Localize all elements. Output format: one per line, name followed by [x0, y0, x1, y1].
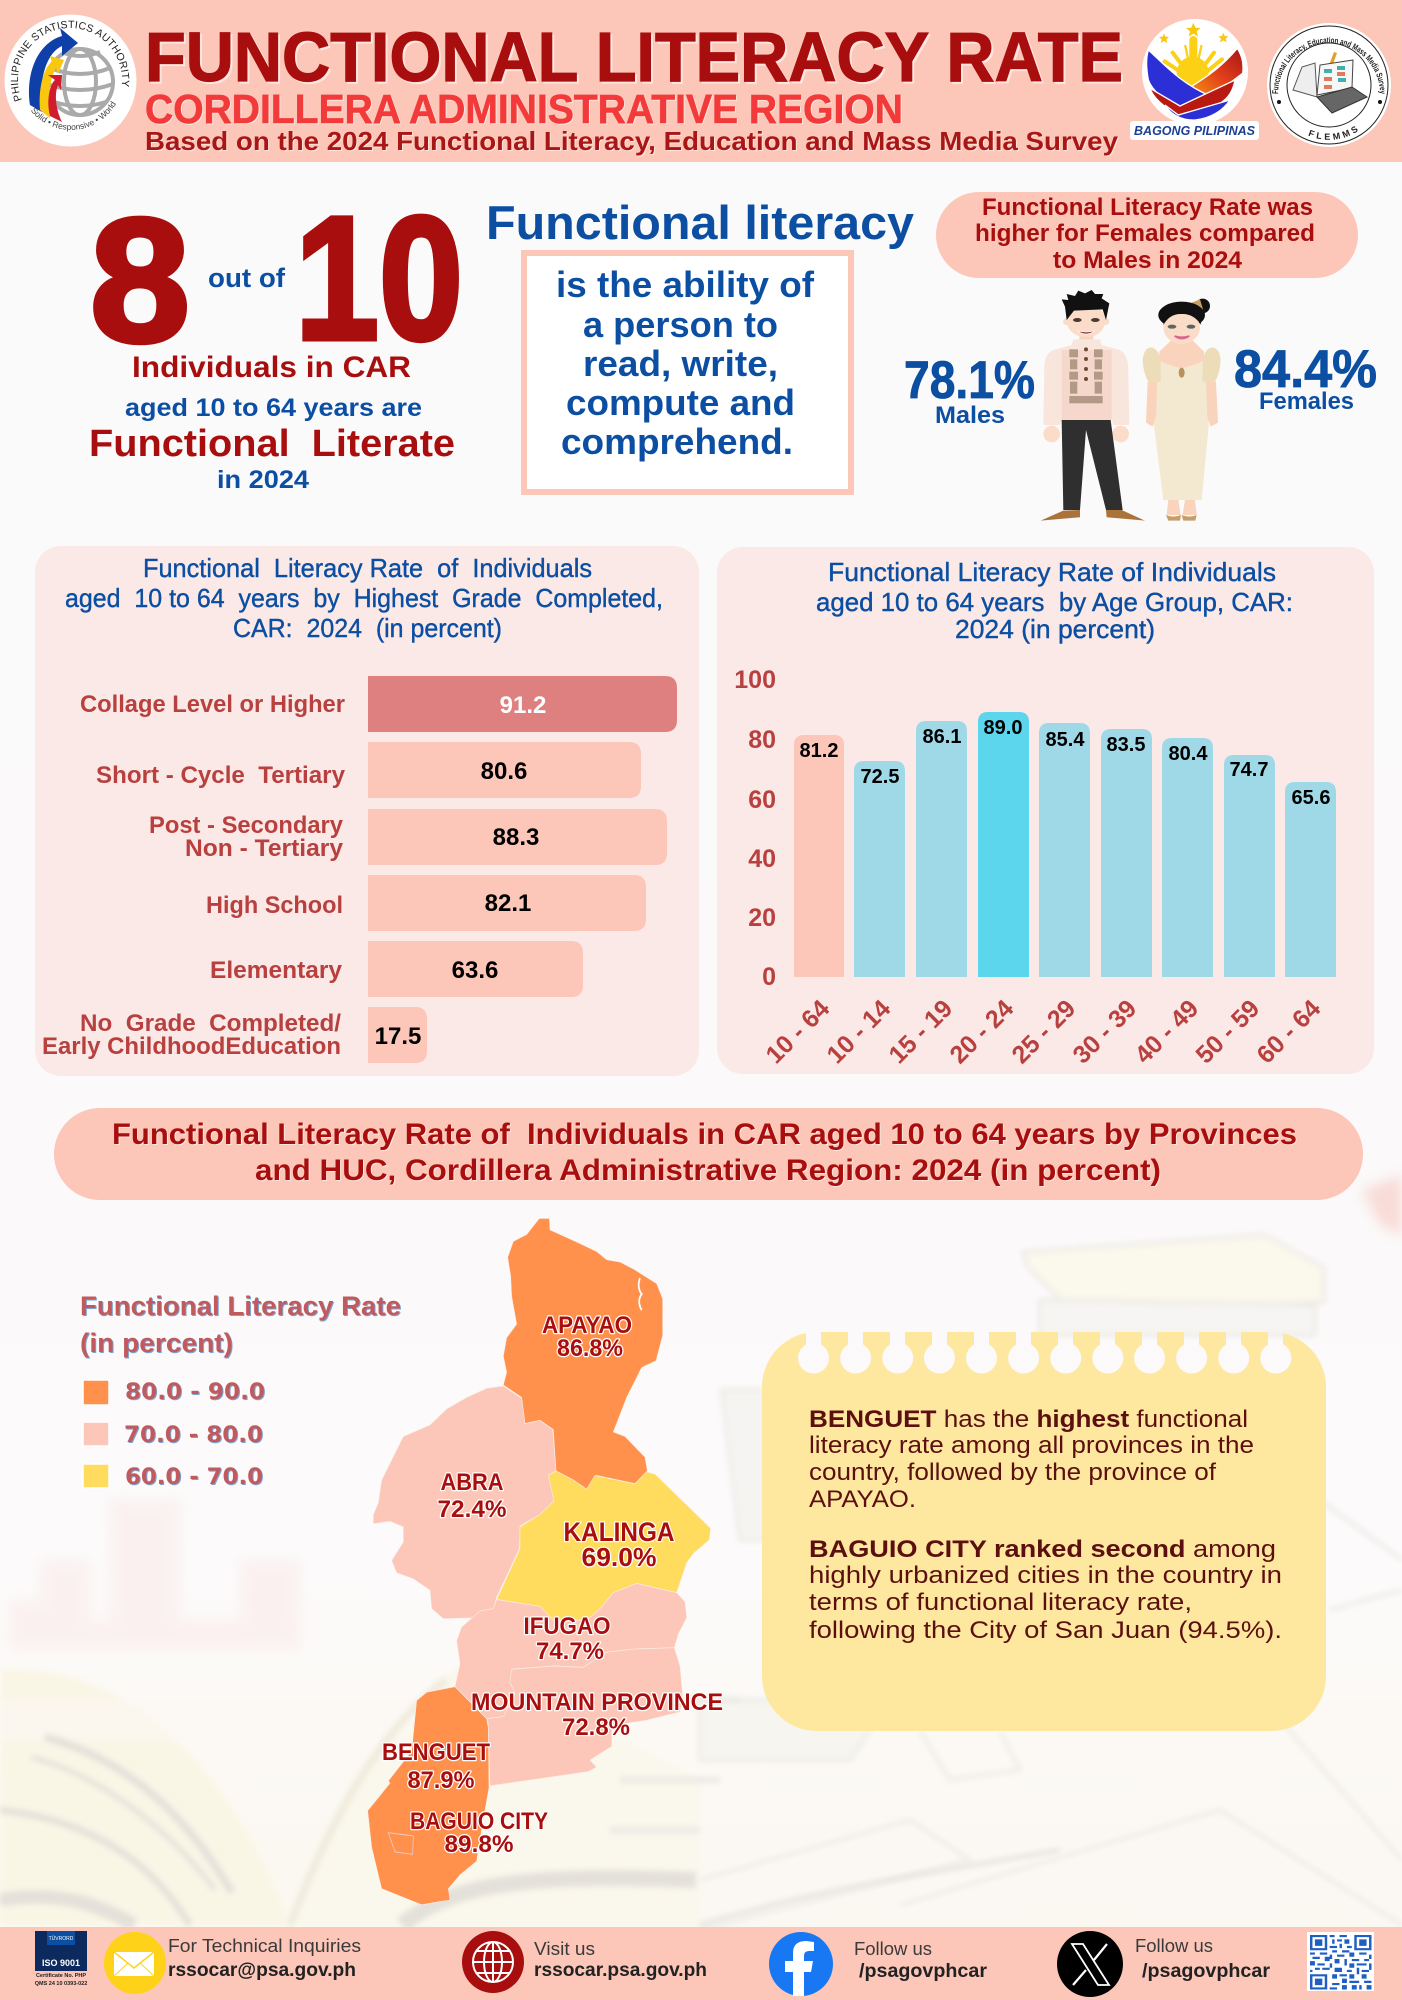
logo: Philippine Statistics Authority — [4, 14, 136, 146]
bar values: 86.1 — [923, 726, 961, 748]
province labels: BAGUIO CITY — [410, 1808, 548, 1835]
chart title — [65, 553, 663, 643]
bar values: 88.3 — [493, 824, 539, 851]
y axis labels — [734, 666, 776, 991]
x axis labels: 25 - 29 — [1006, 994, 1081, 1069]
definition text — [556, 264, 815, 462]
x axis labels: 60 - 64 — [1251, 994, 1326, 1069]
definition text: read, write, — [583, 343, 778, 384]
logo: FLEMMS survey seal: FLEMMS — [1308, 126, 1358, 140]
bar values: 72.5 — [861, 766, 899, 788]
province labels: 72.4% — [438, 1496, 506, 1523]
bar values: 65.6 — [1292, 787, 1330, 809]
facebook text — [854, 1939, 988, 1982]
bar values: 63.6 — [452, 957, 498, 984]
ISO certification badge — [35, 1931, 87, 1987]
x axis labels: 40 - 49 — [1129, 994, 1204, 1069]
illustration: man in barong and woman in filipiniana — [1041, 290, 1221, 521]
province: Benguet — [368, 1687, 489, 1905]
out of: out of — [208, 263, 286, 293]
Baguio boundary — [388, 1833, 413, 1854]
in 2024: in 2024 — [217, 466, 309, 494]
ISO certification badge: TÜVRORD — [49, 1935, 74, 1942]
definition text: a person to — [583, 304, 778, 345]
category labels: Post - Secondary — [149, 812, 344, 839]
province labels: APAYAO — [542, 1312, 632, 1339]
logo: FLEMMS survey seal — [1267, 23, 1391, 147]
province labels: KALINGA — [564, 1517, 674, 1547]
category labels: Early ChildhoodEducation — [42, 1033, 341, 1060]
definition text: compute and — [566, 382, 795, 423]
definition text: comprehend. — [561, 421, 793, 462]
province labels: 74.7% — [536, 1638, 604, 1665]
legend — [80, 1291, 401, 1490]
bar values: 80.4 — [1169, 743, 1208, 765]
bars — [368, 676, 677, 1063]
logo: FLEMMS survey seal: Functional Literacy, Education and Mass Media Survey — [1272, 36, 1384, 94]
header band — [0, 0, 1402, 162]
technical inquiries text — [168, 1936, 361, 1981]
individuals in CAR: Individuals in CAR — [132, 351, 411, 384]
functional literate: Functional Literate — [89, 423, 455, 465]
facebook text: /psagovphcar — [859, 1961, 988, 1982]
map: Cordillera provinces — [368, 1218, 723, 1905]
QR code — [1307, 1932, 1374, 1991]
province labels: 69.0% — [582, 1542, 656, 1572]
province labels — [382, 1312, 723, 1858]
callout: females higher — [936, 192, 1358, 278]
category labels: No Grade Completed/ — [80, 1010, 341, 1037]
ISO certification badge: ISO 9001 — [42, 1958, 80, 1968]
legend title: (in percent) — [80, 1328, 233, 1358]
logo label: BAGONG PILIPINAS — [1134, 123, 1255, 138]
X text: Follow us — [1135, 1936, 1213, 1956]
bar values: 89.0 — [984, 717, 1022, 739]
technical inquiries text: For Technical Inquiries — [168, 1936, 361, 1956]
bar values: 91.2 — [500, 692, 546, 719]
footer band — [0, 1927, 1402, 2000]
legend title: Functional Literacy Rate — [80, 1291, 401, 1321]
x axis labels: 15 - 19 — [883, 994, 958, 1069]
province: Mountain Province — [487, 1648, 683, 1786]
bar values: 80.6 — [481, 758, 527, 785]
province labels: 86.8% — [557, 1335, 623, 1362]
x axis labels: 10 - 64 — [760, 994, 835, 1069]
heading: Functional literacy — [486, 196, 914, 249]
website text: Visit us — [534, 1939, 595, 1959]
note text: literacy rate among all provinces in the — [809, 1432, 1254, 1459]
category labels: Elementary — [210, 957, 343, 984]
bar values: 74.7 — [1230, 759, 1268, 781]
ISO certification badge: QMS 24 10 0393-022 — [35, 1981, 87, 1987]
icon: mail — [104, 1932, 166, 1994]
x axis labels: 50 - 59 — [1190, 994, 1265, 1069]
bar values: 81.2 — [800, 740, 838, 762]
province labels: 89.8% — [444, 1831, 514, 1858]
y axis labels: 40 — [748, 845, 776, 873]
y axis labels: 20 — [748, 904, 776, 932]
icon: facebook — [769, 1932, 833, 1996]
legend labels — [124, 1380, 265, 1490]
icon: globe — [462, 1931, 524, 1993]
chart title — [816, 557, 1293, 644]
logo: Bagong Pilipinas — [1130, 19, 1259, 140]
province labels: BENGUET — [382, 1739, 490, 1766]
y axis labels: 80 — [748, 726, 776, 754]
note text — [809, 1406, 1282, 1644]
subtitle: CORDILLERA ADMINISTRATIVE REGION — [145, 86, 903, 132]
X text — [1135, 1936, 1271, 1982]
stat: females: 84.4% — [1234, 340, 1377, 399]
legend swatches — [83, 1380, 109, 1488]
river detail — [639, 1278, 642, 1310]
province labels: IFUGAO — [524, 1613, 610, 1640]
definition box — [524, 253, 851, 492]
title: FUNCTIONAL LITERACY RATE — [145, 18, 1123, 96]
note text: terms of functional literacy rate, — [809, 1589, 1192, 1616]
legend title — [80, 1291, 401, 1358]
note text: country, followed by the province of — [809, 1459, 1216, 1486]
y axis labels: 0 — [762, 963, 776, 991]
chart title: Functional Literacy Rate of Individuals — [143, 553, 592, 583]
province: Apayao — [503, 1218, 663, 1489]
survey line: Based on the 2024 Functional Literacy, Education and Mass Media Survey — [145, 126, 1119, 156]
callout: females higher: higher for Females compared — [975, 220, 1315, 247]
bar values — [800, 717, 1330, 809]
category labels: Collage Level or Higher — [80, 691, 345, 718]
note text: BAGUIO CITY ranked second among — [809, 1536, 1276, 1563]
stat: males: 78.1% — [904, 351, 1035, 410]
banner: provinces heading: Functional Literacy Rate of Individuals in CAR aged 10 to 64 years by Provinces — [112, 1118, 1297, 1151]
note card — [762, 1332, 1326, 1731]
x axis labels: 10 - 14 — [821, 994, 896, 1069]
bar values: 82.1 — [485, 890, 531, 917]
man — [1041, 290, 1145, 521]
province: Ifugao — [455, 1583, 687, 1719]
bars — [794, 712, 1336, 977]
chart title: aged 10 to 64 years by Age Group, CAR: — [816, 587, 1293, 617]
note text: BENGUET has the highest functional — [809, 1406, 1248, 1433]
icon: X — [1057, 1931, 1123, 1997]
callout: females higher: to Males in 2024 — [1053, 247, 1243, 274]
category labels: Non - Tertiary — [185, 835, 344, 862]
stat: females: Females — [1259, 388, 1354, 415]
website text: rssocar.psa.gov.ph — [534, 1960, 707, 1981]
bar values: 85.4 — [1046, 729, 1085, 751]
panel: grade completed chart — [35, 546, 699, 1076]
logo: Philippine Statistics Authority: PHILIPPINE STATISTICS AUTHORITY — [10, 20, 130, 102]
chart title: CAR: 2024 (in percent) — [233, 613, 502, 643]
big number 8: 8 — [90, 183, 190, 379]
province labels: MOUNTAIN PROVINCE — [471, 1689, 723, 1716]
province labels: ABRA — [440, 1469, 504, 1496]
stat: 8 out of 10 — [89, 181, 463, 494]
X text: /psagovphcar — [1142, 1961, 1271, 1982]
banner: provinces heading — [54, 1108, 1363, 1200]
category labels: Short - Cycle Tertiary — [96, 762, 346, 789]
technical inquiries text: rssocar@psa.gov.ph — [168, 1960, 356, 1981]
chart title: 2024 (in percent) — [955, 614, 1155, 644]
y axis labels: 100 — [734, 666, 776, 694]
big number 10: 10 — [295, 181, 463, 377]
website text — [534, 1939, 707, 1981]
stat: males — [904, 351, 1035, 429]
province: Kalinga — [497, 1471, 711, 1620]
province: Abra — [373, 1386, 556, 1619]
province labels: 87.9% — [408, 1767, 474, 1794]
chart title: Functional Literacy Rate of Individuals — [828, 557, 1276, 587]
stat: males: Males — [935, 402, 1005, 429]
bar values: 17.5 — [375, 1023, 421, 1050]
bar values — [375, 692, 546, 1050]
panel: age group chart — [717, 547, 1374, 1074]
province labels: 72.8% — [562, 1714, 630, 1741]
chart title: aged 10 to 64 years by Highest Grade Completed, — [65, 583, 663, 613]
note text: following the City of San Juan (94.5%). — [809, 1617, 1282, 1644]
y axis labels: 60 — [748, 786, 776, 814]
legend labels: 60.0 - 70.0 — [125, 1465, 263, 1490]
aged text: aged 10 to 64 years are — [125, 394, 422, 422]
note text: APAYAO. — [809, 1486, 916, 1513]
banner: provinces heading: and HUC, Cordillera Administrative Region: 2024 (in percent) — [255, 1154, 1161, 1187]
ISO certification badge: Certificate No. PHP — [36, 1973, 86, 1979]
facebook text: Follow us — [854, 1939, 932, 1959]
definition text: is the ability of — [556, 264, 815, 305]
category labels — [42, 691, 346, 1060]
x axis labels: 20 - 24 — [944, 994, 1019, 1069]
legend labels: 70.0 - 80.0 — [124, 1423, 263, 1448]
callout: females higher: Functional Literacy Rate was — [982, 194, 1313, 221]
woman — [1143, 299, 1221, 521]
legend labels: 80.0 - 90.0 — [125, 1380, 265, 1405]
bar values: 83.5 — [1107, 734, 1145, 756]
note text: highly urbanized cities in the country in — [809, 1562, 1282, 1589]
category labels: High School — [206, 892, 343, 919]
x axis labels — [760, 994, 1326, 1069]
definition of functional literacy — [486, 196, 914, 492]
x axis labels: 30 - 39 — [1067, 994, 1142, 1069]
